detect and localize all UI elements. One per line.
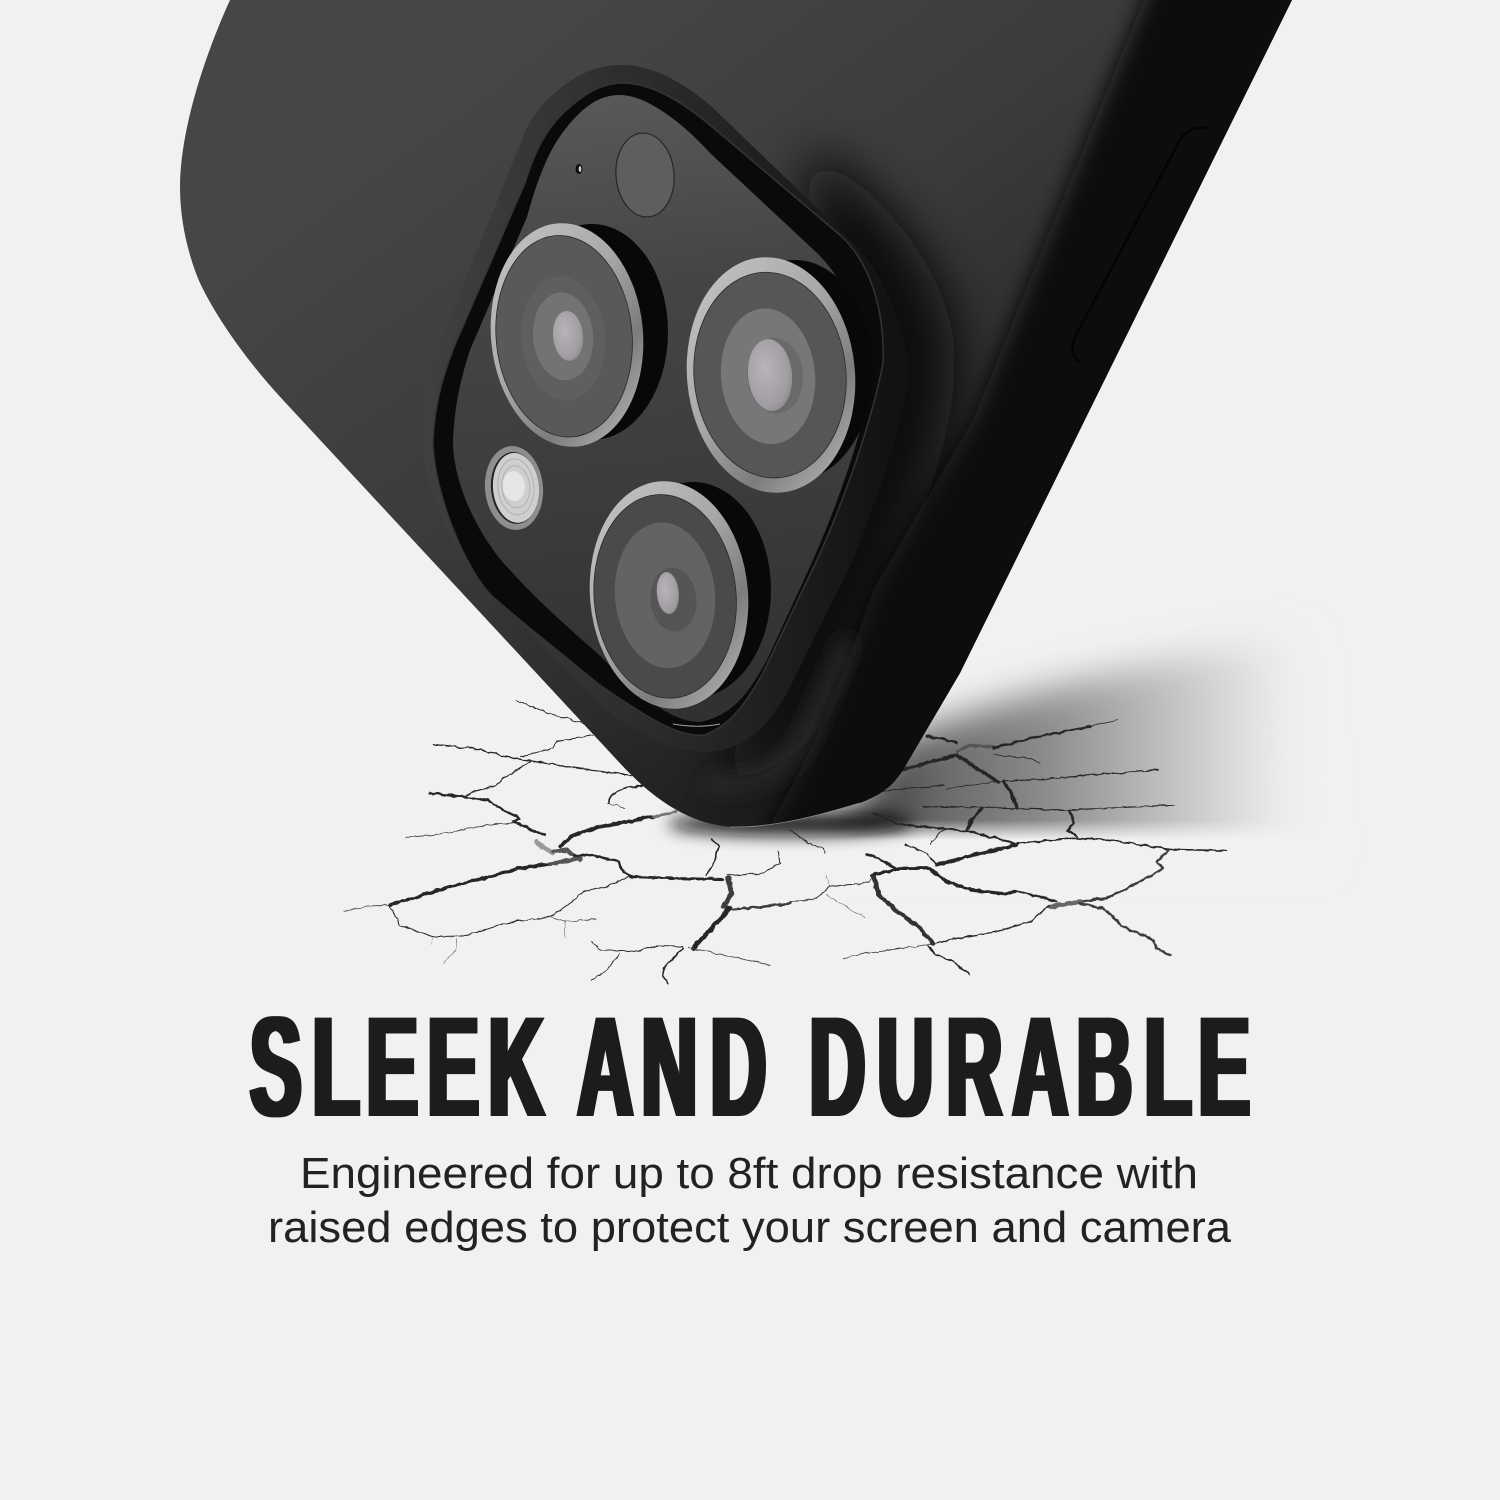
camera surround — [423, 65, 910, 752]
flash — [481, 444, 547, 532]
lens top left — [482, 217, 668, 453]
side button — [1073, 128, 1208, 362]
camera plate — [453, 95, 870, 722]
body shading and side band — [705, 0, 1330, 840]
camera groove — [433, 83, 883, 735]
cracks left of impact — [343, 700, 790, 983]
microphone dot — [576, 164, 582, 174]
description: raised edges to protect your screen and camera — [268, 1203, 1232, 1252]
cracks right of impact — [790, 720, 1227, 975]
infographic canvas — [180, 0, 1292, 1251]
ground cracks — [343, 700, 1227, 983]
phone case — [180, 0, 1330, 840]
lens bottom — [580, 475, 771, 715]
bottom edge highlight — [730, 803, 860, 827]
lidar sensor — [612, 131, 678, 219]
description — [268, 1149, 1232, 1252]
plate bottom glint — [673, 724, 720, 726]
phone body — [180, 0, 1292, 827]
title: SLEEK AND DURABLE — [250, 988, 1250, 1147]
lens right — [677, 250, 873, 500]
description: Engineered for up to 8ft drop resistance with — [300, 1149, 1198, 1198]
phone cast shadow — [668, 640, 1340, 900]
